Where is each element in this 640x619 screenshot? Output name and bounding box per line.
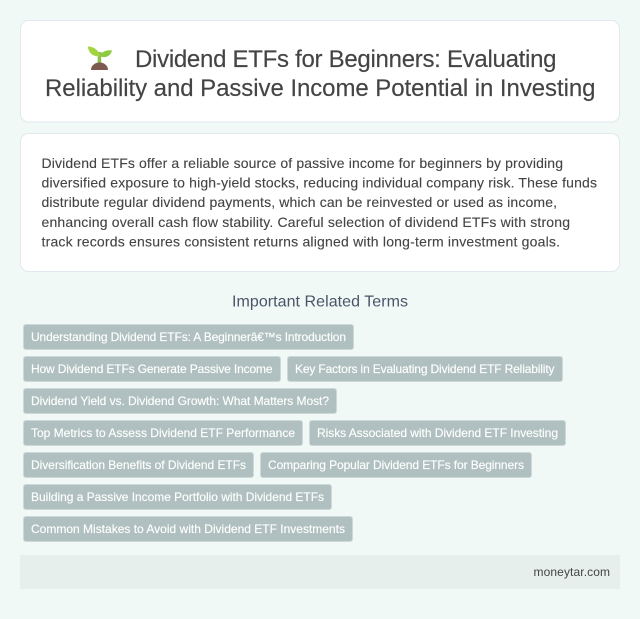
summary text: diversified exposure to high-yield stocks, reducing individual company risk. These funds [42, 175, 597, 191]
footer source text: moneytar.com [534, 565, 610, 579]
tag: yield vs growth [24, 388, 336, 414]
tag: yield vs growth: Dividend Yield vs. Dividend Growth: What Matters Most? [31, 394, 329, 408]
title: Dividend ETFs for Beginners: Evaluating [135, 46, 556, 73]
title: Reliability and Passive Income Potential in Investing [45, 75, 596, 102]
tag: risks [310, 420, 566, 446]
tag: building a portfolio: Building a Passive Income Portfolio with Dividend ETFs [31, 490, 324, 504]
tag: common mistakes: Common Mistakes to Avoid with Dividend ETF Investments [31, 522, 345, 536]
tag: understanding dividend ETFs [24, 324, 354, 350]
tag: reliability factors [288, 356, 562, 382]
title [45, 46, 596, 102]
tag: top metrics: Top Metrics to Assess Dividend ETF Performance [31, 426, 295, 440]
tag: generate passive income [24, 356, 280, 382]
summary text: track records ensures consistent returns aligned with long-term investment goals. [42, 233, 560, 249]
summary text: enhancing overall cash flow stability. Careful selection of dividend ETFs with strong [42, 214, 570, 230]
panel: summary card [20, 134, 620, 272]
footer [20, 555, 620, 589]
heading: important related terms: Important Related Terms [232, 294, 408, 310]
tag: understanding dividend ETFs: Understanding Dividend ETFs: A Beginnerâ€™s Introduction [31, 330, 346, 344]
tag: diversification: Diversification Benefits of Dividend ETFs [31, 458, 246, 472]
summary text: distribute regular dividend payments, which can be reinvested or used as income, [42, 194, 557, 210]
tag: reliability factors: Key Factors in Evaluating Dividend ETF Reliability [295, 362, 554, 376]
icon: seedling [88, 46, 112, 70]
tag: common mistakes [24, 516, 352, 542]
tag: generate passive income: How Dividend ETFs Generate Passive Income [31, 362, 273, 376]
tag: diversification [24, 452, 254, 478]
panel: related term tags [24, 324, 566, 542]
tag: comparing popular ETFs: Comparing Popular Dividend ETFs for Beginners [268, 458, 524, 472]
tag: building a portfolio [24, 484, 332, 510]
panel: title card [20, 20, 620, 122]
summary text: Dividend ETFs offer a reliable source of passive income for beginners by providing [42, 155, 563, 171]
summary text [42, 155, 597, 249]
tag: top metrics [24, 420, 302, 446]
tag: risks: Risks Associated with Dividend ETF Investing [317, 426, 558, 440]
tag: comparing popular ETFs [260, 452, 532, 478]
